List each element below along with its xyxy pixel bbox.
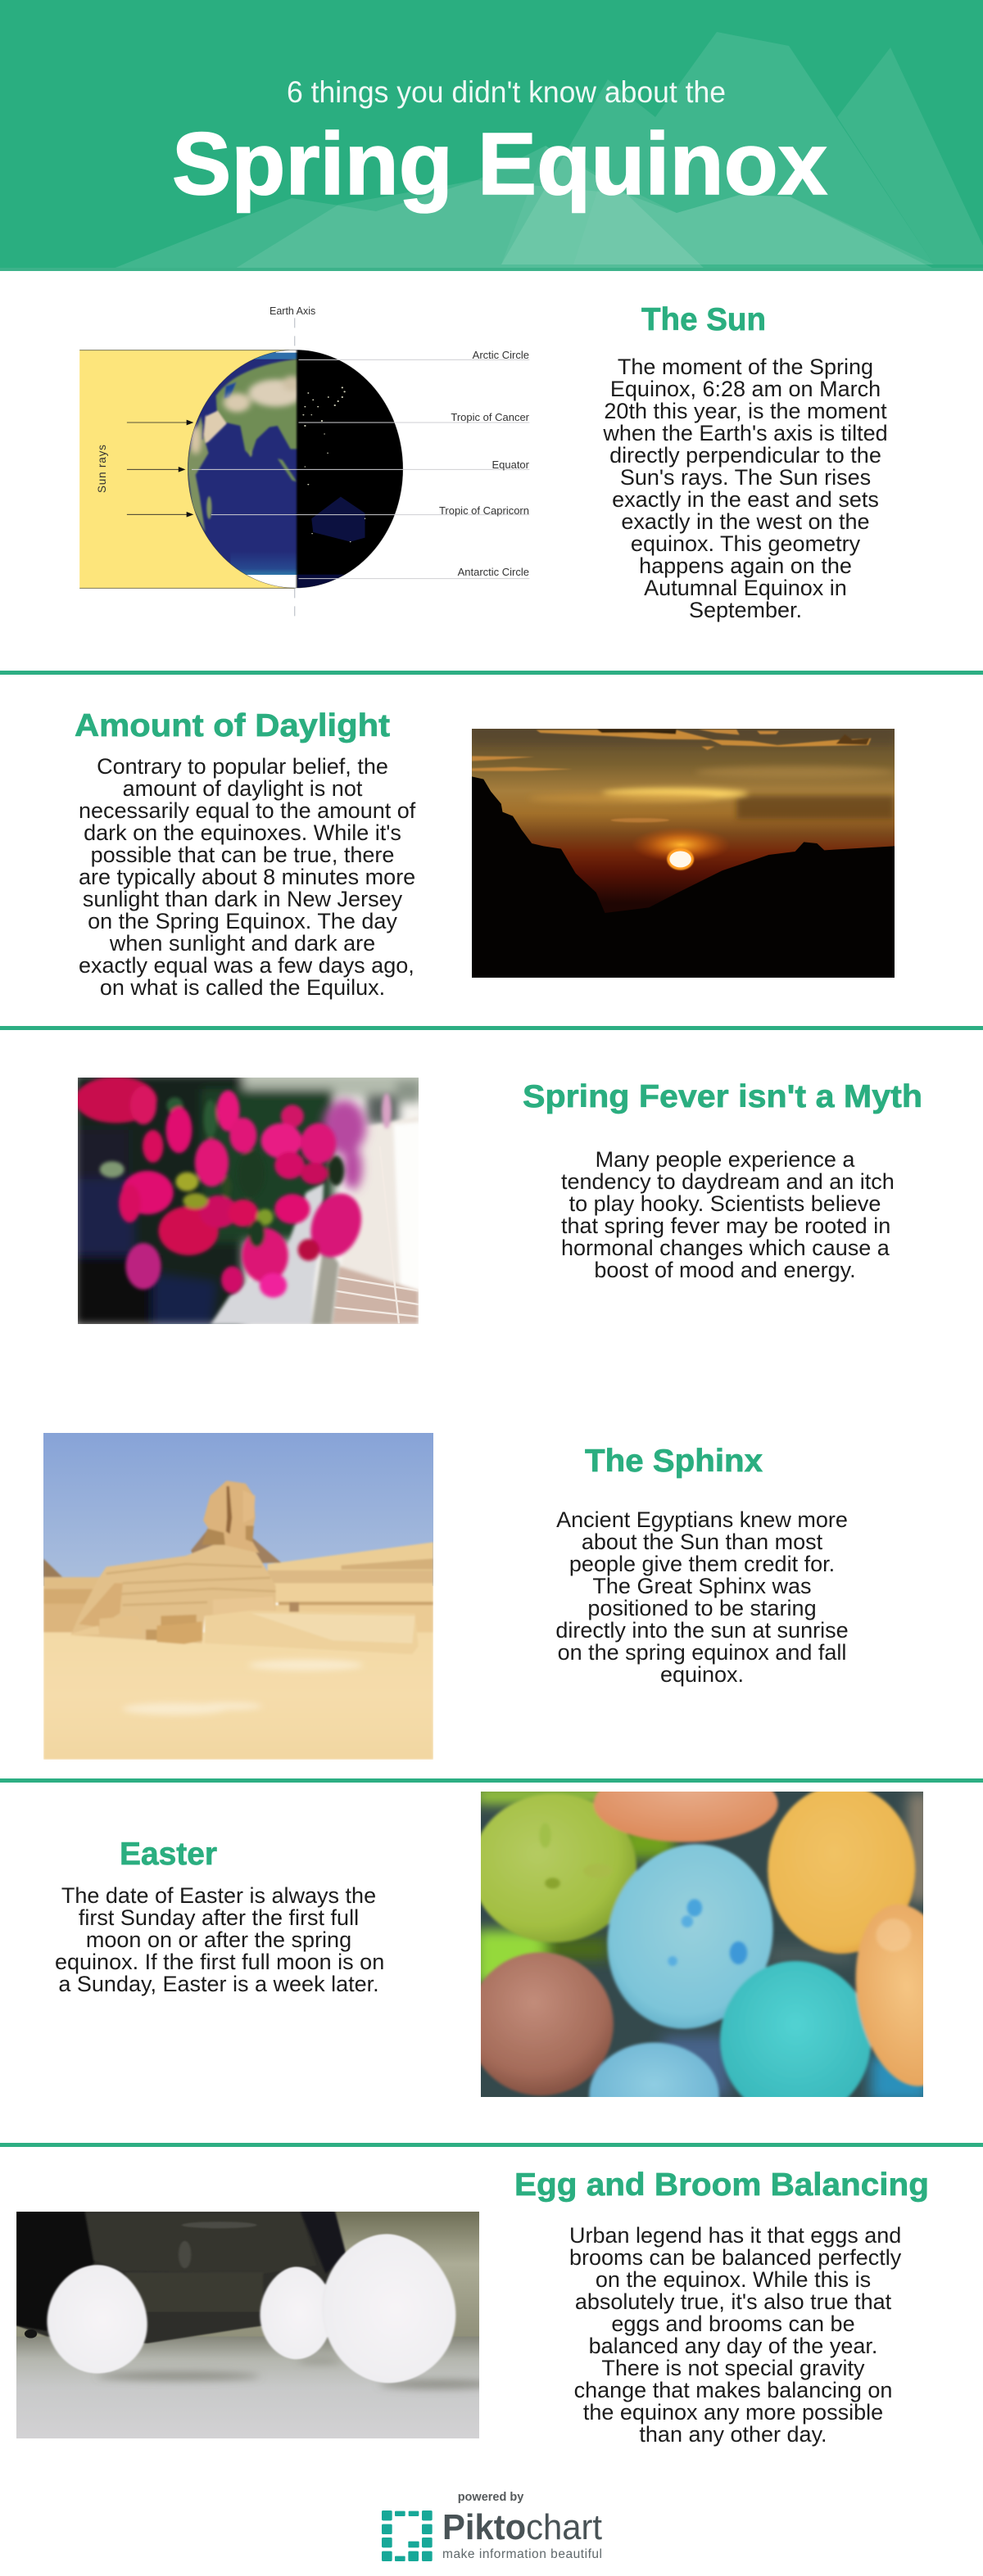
text: the sun: equinox. This geometry [631,531,860,556]
text: egg and broom balancing: on the equinox. While this is [596,2267,871,2292]
label: earth axis: Earth Axis [270,305,315,317]
text: egg and broom balancing: balanced any day of the year. [589,2334,877,2358]
text: amount of daylight: necessarily equal to the amount of [79,798,415,823]
text: spring fever: Many people experience a [596,1147,854,1172]
text: the sphinx [555,1507,849,1687]
text: easter: a Sunday, Easter is a week later. [58,1972,379,1996]
earth illustration [79,318,529,616]
panel: spring fever [78,1078,922,1324]
text: the sphinx: on the spring equinox and fall [558,1640,846,1665]
label: tropic of capricorn: Tropic of Capricorn [439,504,529,517]
photo: balanced eggs [16,2212,479,2438]
text: amount of daylight: possible that can be true, there [91,843,394,867]
heading: spring fever: Spring Fever isn't a Myth [523,1079,922,1114]
text: amount of daylight: Contrary to popular belief, the [97,754,388,779]
text: egg and broom balancing: change that makes balancing on [574,2378,892,2402]
heading: amount of daylight: Amount of Daylight [75,708,390,743]
text: easter: equinox. If the first full moon is on [55,1950,384,1974]
panel: the sphinx [43,1433,849,1760]
text: amount of daylight: are typically about 8 minutes more [79,865,415,889]
text: amount of daylight: on the Spring Equinox. The day [88,909,397,933]
text: egg and broom balancing: absolutely true, it's also true that [575,2289,891,2314]
label: sun rays: Sun rays [96,444,108,493]
icon: logo mark [382,2510,433,2561]
text: amount of daylight: amount of daylight is not [123,776,362,801]
text: amount of daylight: when sunlight and dark are [110,931,375,956]
text: the sphinx: equinox. [660,1662,744,1687]
heading: egg and broom balancing: Egg and Broom Balancing [514,2167,929,2203]
text: the sun: directly perpendicular to the [609,443,881,468]
heading: the sun: The Sun [641,302,766,337]
heading: the sphinx: The Sphinx [585,1444,763,1479]
text: spring fever [561,1147,895,1282]
photo: bougainvillea flowers [78,1078,419,1324]
text: the sun: Equinox, 6:28 am on March [610,377,881,401]
text: the sphinx: Ancient Egyptians knew more [556,1507,848,1532]
panel: the sun [79,302,888,622]
text: amount of daylight: sunlight than dark in New Jersey [83,887,402,911]
text: egg and broom balancing [569,2223,901,2447]
text: easter: The date of Easter is always the [61,1883,376,1908]
text: the sun: Sun's rays. The Sun rises [620,465,871,490]
label: antarctic circle: Antarctic Circle [458,566,529,578]
text: spring fever: tendency to daydream and an itch [561,1169,895,1194]
text: egg and broom balancing: eggs and brooms can be [611,2312,855,2336]
text: the sphinx: The Great Sphinx was [592,1574,812,1598]
text: spring fever: that spring fever may be rooted in [561,1213,890,1238]
label: equator: Equator [492,459,529,471]
text: egg and broom balancing: brooms can be balanced perfectly [569,2245,901,2270]
subtitle: 6 things you didn't know about the [287,75,726,109]
text: the sun: exactly in the west on the [621,509,870,534]
panel: egg and broom balancing [16,2167,929,2447]
text: the sphinx: positioned to be staring [587,1596,817,1620]
photo: coloured easter eggs [481,1792,923,2097]
label: tropic of cancer: Tropic of Cancer [451,411,529,423]
arrows: sun rays [127,420,193,517]
text: the sun: exactly in the east and sets [612,487,879,512]
text: egg and broom balancing: There is not special gravity [601,2356,865,2380]
label: arctic circle: Arctic Circle [473,349,529,361]
photo: great sphinx [43,1433,433,1760]
footer: piktochart logo [382,2491,602,2561]
text: easter: first Sunday after the first full [79,1905,359,1930]
text: the sun: September. [689,598,802,622]
text: egg and broom balancing: Urban legend has it that eggs and [569,2223,901,2248]
photo: sunset over hills [472,729,895,978]
text: the sun: happens again on the [639,554,852,578]
text: spring fever: to play hooky. Scientists believe [569,1191,881,1216]
text: the sun: when the Earth's axis is tilted [603,421,888,445]
faceted mountain background [0,32,983,271]
text: the sphinx: directly into the sun at sunrise [555,1618,849,1643]
text: egg and broom balancing: the equinox any more possible [583,2400,883,2425]
text: amount of daylight [79,754,416,1000]
panel: amount of daylight [75,708,895,1000]
text: the sun: Autumnal Equinox in [644,576,847,600]
text: the sun: The moment of the Spring [618,355,873,379]
text: amount of daylight: exactly equal was a few days ago, [79,953,414,978]
text: amount of daylight: dark on the equinoxes. While it's [84,820,401,845]
text: amount of daylight: on what is called the Equilux. [100,975,385,1000]
text: the sphinx: people give them credit for. [569,1552,835,1576]
text: easter: moon on or after the spring [86,1927,351,1952]
panel: easter [55,1792,923,2097]
text: egg and broom balancing: than any other day. [639,2422,827,2447]
text: the sphinx: about the Sun than most [582,1530,822,1554]
text: powered by: powered by [458,2491,523,2504]
text: the sun [603,355,888,622]
earth diagram [79,305,529,616]
text: the sun: 20th this year, is the moment [604,399,887,423]
tagline: make information beautiful [442,2547,602,2561]
text: easter [55,1883,384,1996]
header banner [0,0,983,271]
text: spring fever: hormonal changes which cause a [561,1236,890,1260]
text: spring fever: boost of mood and energy. [594,1258,856,1282]
